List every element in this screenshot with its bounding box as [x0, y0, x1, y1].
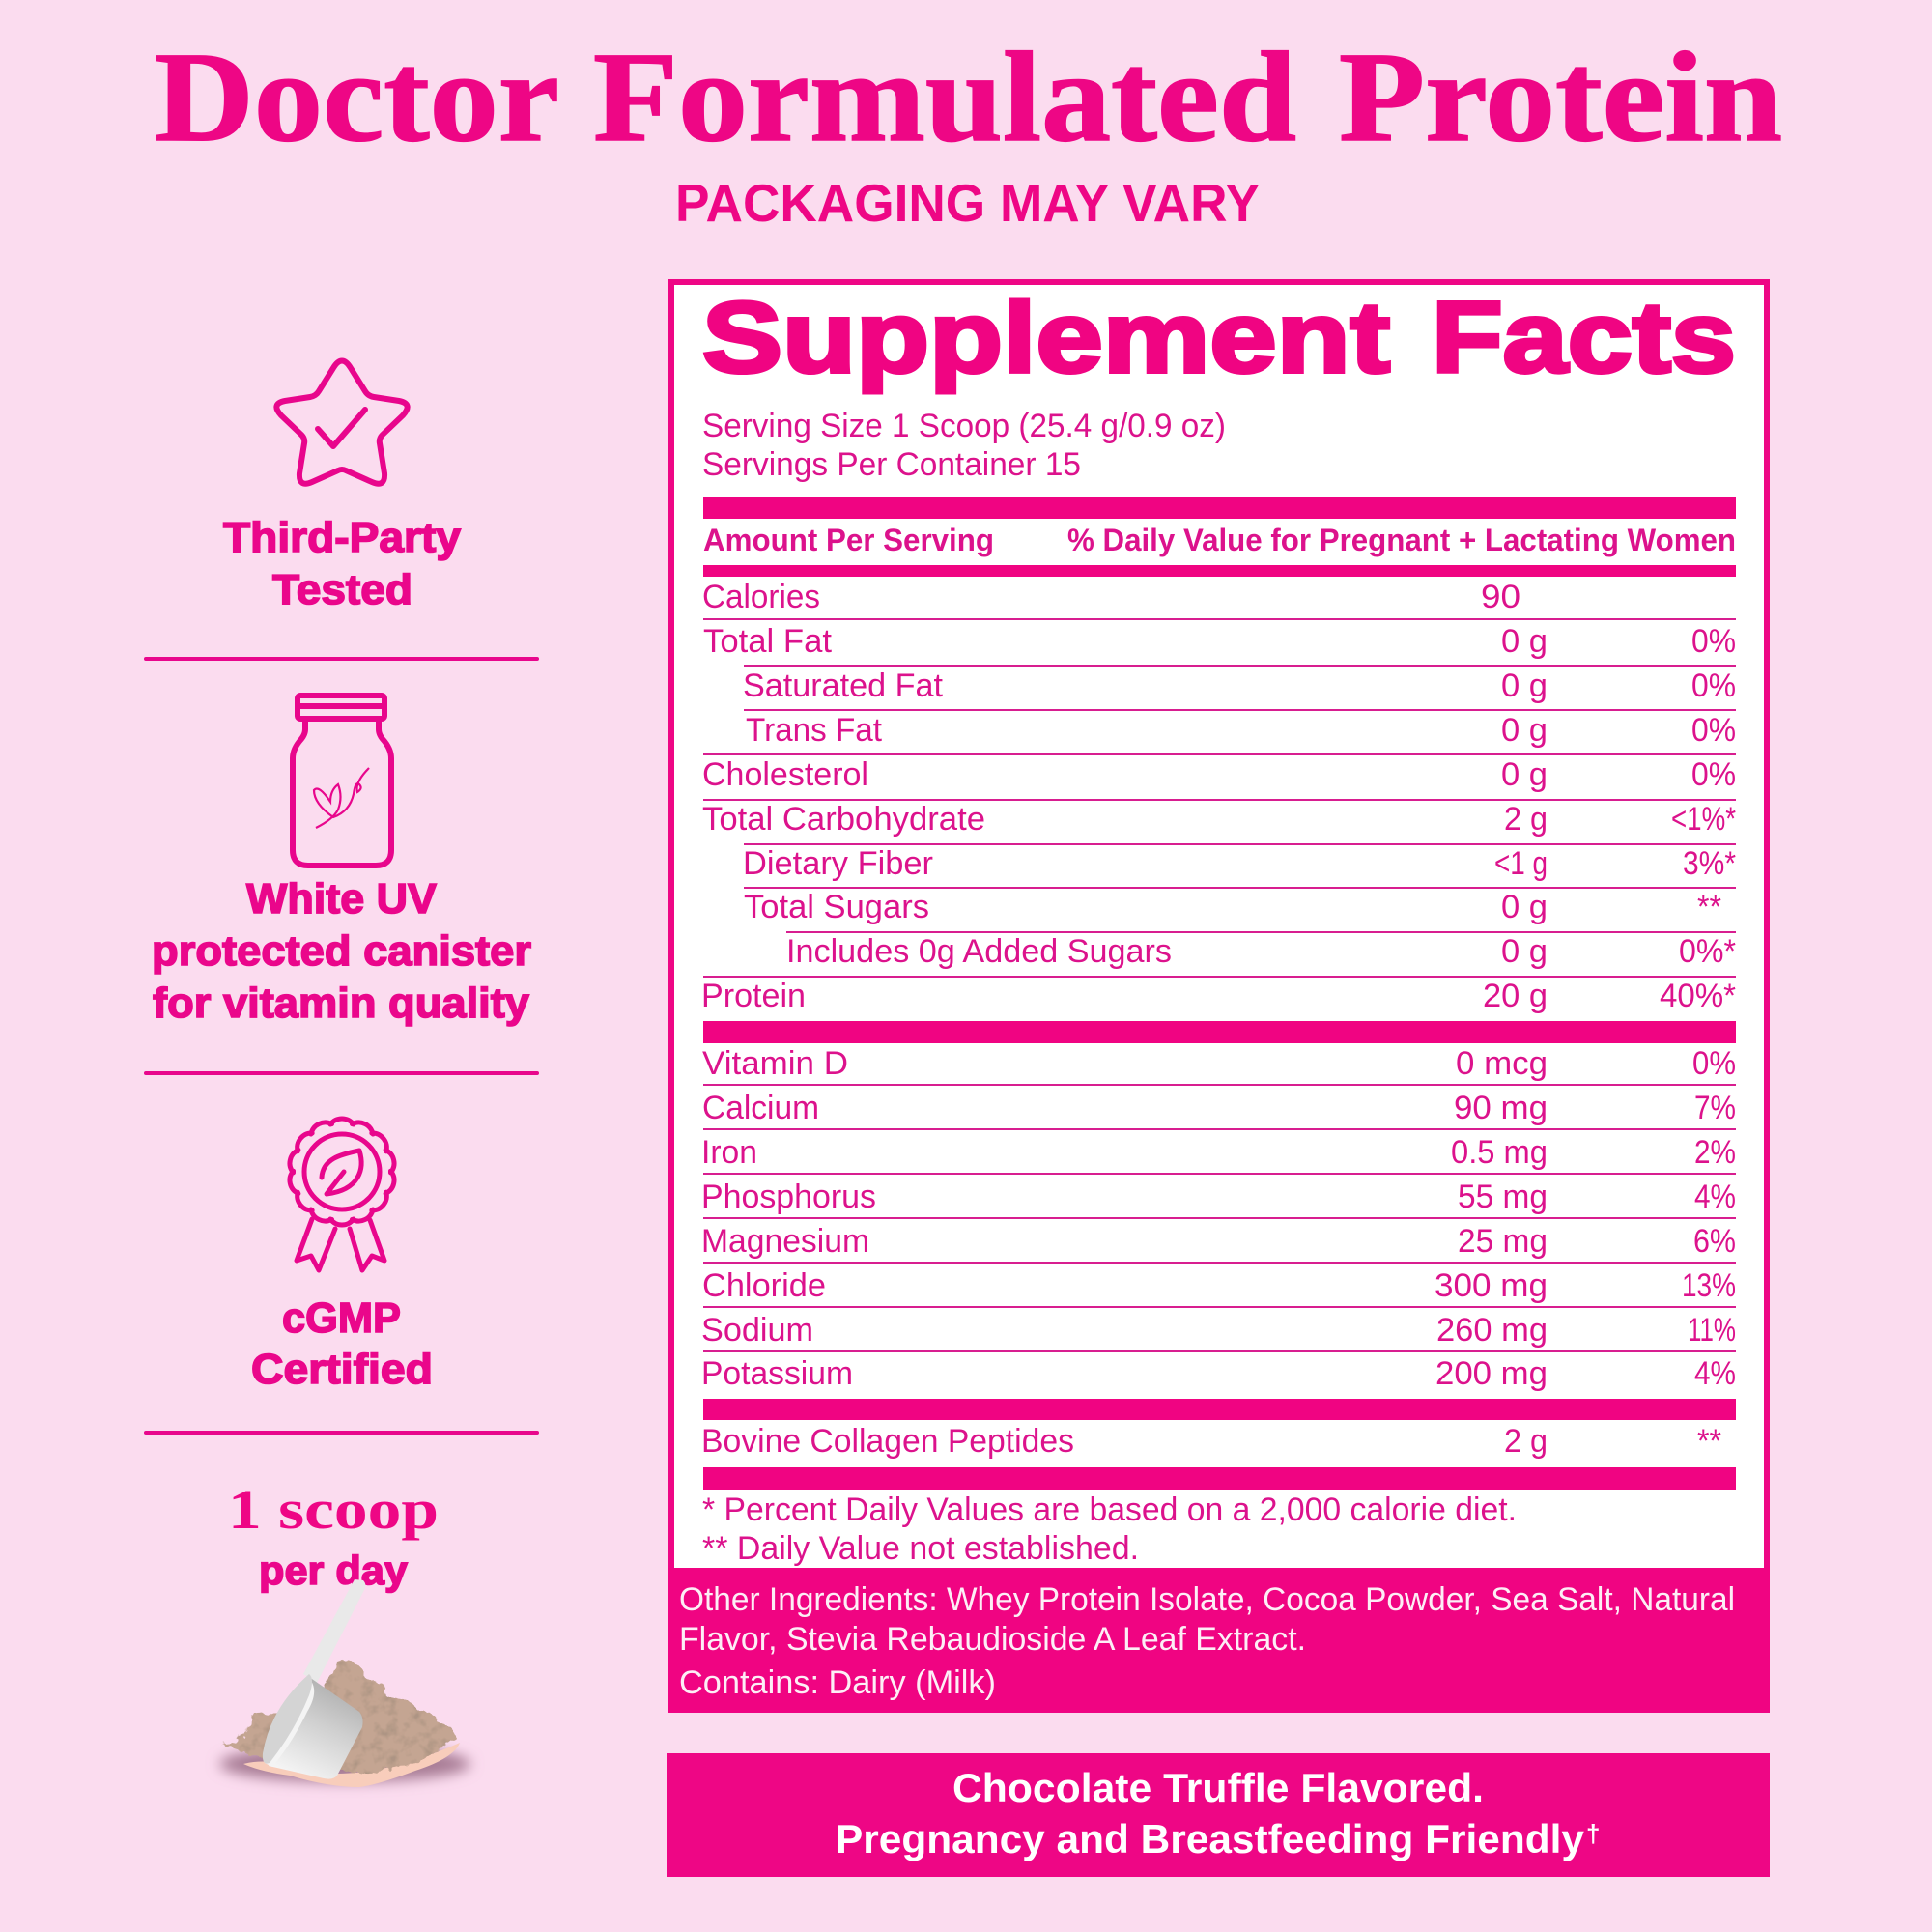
row: trans fat: Trans Fat: [746, 712, 883, 749]
row: bovine collagen peptides: 2 g: [1504, 1423, 1548, 1460]
label: third-party tested: Third-Party: [223, 514, 462, 561]
footnotes: ** Daily Value not established.: [702, 1530, 1139, 1567]
row: phosphorus: Phosphorus: [701, 1179, 876, 1215]
title: Doctor: [155, 25, 559, 168]
row: total sugars: **: [1697, 889, 1721, 925]
panel: other ingredients: Flavor, Stevia Rebaudioside A Leaf Extract.: [679, 1621, 1306, 1658]
icon: star with check: [276, 361, 408, 484]
serving info: Serving Size 1 Scoop (25.4 g/0.9 oz): [702, 408, 1226, 444]
footnotes: [702, 1492, 1517, 1567]
row: iron: [701, 1134, 1736, 1171]
row: trans fat: [746, 712, 1736, 749]
label: third-party tested: Tested: [272, 566, 412, 613]
row: saturated fat: [743, 668, 1736, 704]
row: total carbohydrate: 2 g: [1504, 801, 1548, 838]
heading: supplement facts: Supplement: [702, 282, 1390, 394]
label: 1 scoop per day: [228, 1478, 439, 1593]
label: 1 scoop per day: per day: [259, 1548, 409, 1593]
banner: flavor and pregnancy note: Pregnancy and Breastfeeding Friendly: [836, 1816, 1585, 1861]
row: potassium: 200 mg: [1435, 1355, 1548, 1392]
row: added sugars: 0%*: [1679, 933, 1736, 970]
row: cholesterol: [702, 756, 1736, 793]
title: Protein: [1339, 25, 1782, 168]
row: total carbohydrate: [702, 801, 1736, 838]
panel: other ingredients: Contains: Dairy (Milk): [679, 1664, 996, 1701]
row: calories: Calories: [702, 579, 820, 615]
label: white uv canister: White UV: [246, 875, 438, 923]
row: chloride: 13%: [1682, 1267, 1736, 1304]
serving info: Servings Per Container 15: [702, 446, 1081, 483]
row: iron: Iron: [701, 1134, 757, 1171]
row: total fat: 0 g: [1501, 623, 1548, 660]
banner: flavor and pregnancy note: †: [1586, 1819, 1600, 1848]
row: magnesium: 6%: [1693, 1223, 1736, 1260]
table header: % Daily Value for Pregnant + Lactating Women: [1067, 523, 1736, 557]
label: third-party tested: [223, 514, 462, 613]
row: iron: 0.5 mg: [1451, 1134, 1548, 1171]
label: white uv canister: protected canister: [152, 927, 531, 975]
illustration: scoop in powder: [219, 1579, 470, 1787]
banner: flavor and pregnancy note: Chocolate Truffle Flavored.: [952, 1765, 1484, 1810]
row: magnesium: Magnesium: [701, 1223, 869, 1260]
label: cgmp certified: [251, 1294, 433, 1393]
panel: supplement facts: [668, 282, 1770, 1712]
row: protein: [701, 978, 1736, 1014]
row: cholesterol: Cholesterol: [702, 756, 868, 793]
row: saturated fat: 0 g: [1501, 668, 1548, 704]
row: phosphorus: 4%: [1694, 1179, 1736, 1215]
panel: other ingredients: Other Ingredients: Whey Protein Isolate, Cocoa Powder, Sea Salt, Natural: [679, 1581, 1735, 1618]
row: trans fat: 0 g: [1501, 712, 1548, 749]
row: total carbohydrate: <1%*: [1671, 801, 1736, 838]
row: vitamin d: Vitamin D: [702, 1045, 848, 1082]
footnotes: * Percent Daily Values are based on a 2,000 calorie diet.: [702, 1492, 1517, 1528]
label: white uv canister: for vitamin quality: [153, 980, 530, 1027]
label: 1 scoop per day: 1 scoop: [228, 1478, 439, 1541]
row: vitamin d: 0%: [1692, 1045, 1736, 1082]
row: calcium: 90 mg: [1454, 1090, 1548, 1126]
heading: supplement facts: [702, 282, 1736, 394]
row: protein: 20 g: [1483, 978, 1548, 1014]
row: magnesium: [701, 1223, 1736, 1260]
row: dietary fiber: Dietary Fiber: [743, 845, 933, 882]
row: dietary fiber: <1 g: [1494, 845, 1548, 882]
row: calories: 90: [1481, 579, 1520, 615]
row: protein: 40%*: [1660, 978, 1736, 1014]
row: saturated fat: 0%: [1691, 668, 1736, 704]
heading: supplement facts: Facts: [1432, 282, 1736, 394]
row: calcium: [702, 1090, 1736, 1126]
row: total carbohydrate: Total Carbohydrate: [702, 801, 985, 838]
panel: trust badges column: [144, 361, 539, 1787]
panel: other ingredients: [668, 1568, 1770, 1712]
row: calories: [702, 579, 1520, 615]
row: total fat: 0%: [1691, 623, 1736, 660]
row: iron: 2%: [1694, 1134, 1736, 1171]
row: potassium: Potassium: [701, 1355, 853, 1392]
row: bovine collagen peptides: **: [1697, 1423, 1721, 1460]
row: vitamin d: [702, 1045, 1736, 1082]
row: calcium: Calcium: [702, 1090, 819, 1126]
row: total sugars: [744, 889, 1721, 925]
icon: jar: [293, 696, 391, 866]
row: protein: Protein: [701, 978, 806, 1014]
row: added sugars: 0 g: [1501, 933, 1548, 970]
row: vitamin d: 0 mcg: [1456, 1045, 1548, 1082]
title: Formulated: [593, 25, 1296, 168]
row: chloride: Chloride: [702, 1267, 826, 1304]
row: added sugars: Includes 0g Added Sugars: [786, 933, 1172, 970]
row: total sugars: Total Sugars: [744, 889, 929, 925]
row: bovine collagen peptides: Bovine Collagen Peptides: [701, 1423, 1074, 1460]
row: chloride: 300 mg: [1435, 1267, 1548, 1304]
row: total sugars: 0 g: [1501, 889, 1548, 925]
table header: Amount Per Serving: [703, 523, 994, 557]
row: cholesterol: 0 g: [1501, 756, 1548, 793]
banner: flavor and pregnancy note: [667, 1753, 1770, 1877]
row: dietary fiber: 3%*: [1683, 845, 1736, 882]
row: cholesterol: 0%: [1691, 756, 1736, 793]
row: chloride: [702, 1267, 1736, 1304]
table header: [703, 523, 1736, 557]
row: potassium: 4%: [1694, 1355, 1736, 1392]
row: saturated fat: Saturated Fat: [743, 668, 944, 704]
row: total fat: Total Fat: [703, 623, 833, 660]
row: phosphorus: [701, 1179, 1736, 1215]
row: trans fat: 0%: [1691, 712, 1736, 749]
row: magnesium: 25 mg: [1458, 1223, 1548, 1260]
label: white uv canister: [152, 875, 531, 1027]
row: sodium: 11%: [1688, 1312, 1736, 1349]
row: calcium: 7%: [1694, 1090, 1736, 1126]
label: cgmp certified: cGMP: [282, 1294, 401, 1342]
row: sodium: [701, 1312, 1736, 1349]
row: dietary fiber: [743, 845, 1736, 882]
title: [155, 25, 1782, 168]
label: cgmp certified: Certified: [251, 1346, 433, 1393]
subtitle: PACKAGING MAY VARY: [675, 173, 1260, 233]
serving info: [702, 408, 1226, 483]
row: sodium: Sodium: [701, 1312, 813, 1349]
row: added sugars: [786, 933, 1736, 970]
row: potassium: [701, 1355, 1736, 1392]
row: phosphorus: 55 mg: [1458, 1179, 1548, 1215]
row: total fat: [703, 623, 1736, 660]
row: sodium: 260 mg: [1436, 1312, 1548, 1349]
row: bovine collagen peptides: [701, 1423, 1721, 1460]
icon: rosette with leaf: [288, 1119, 396, 1270]
